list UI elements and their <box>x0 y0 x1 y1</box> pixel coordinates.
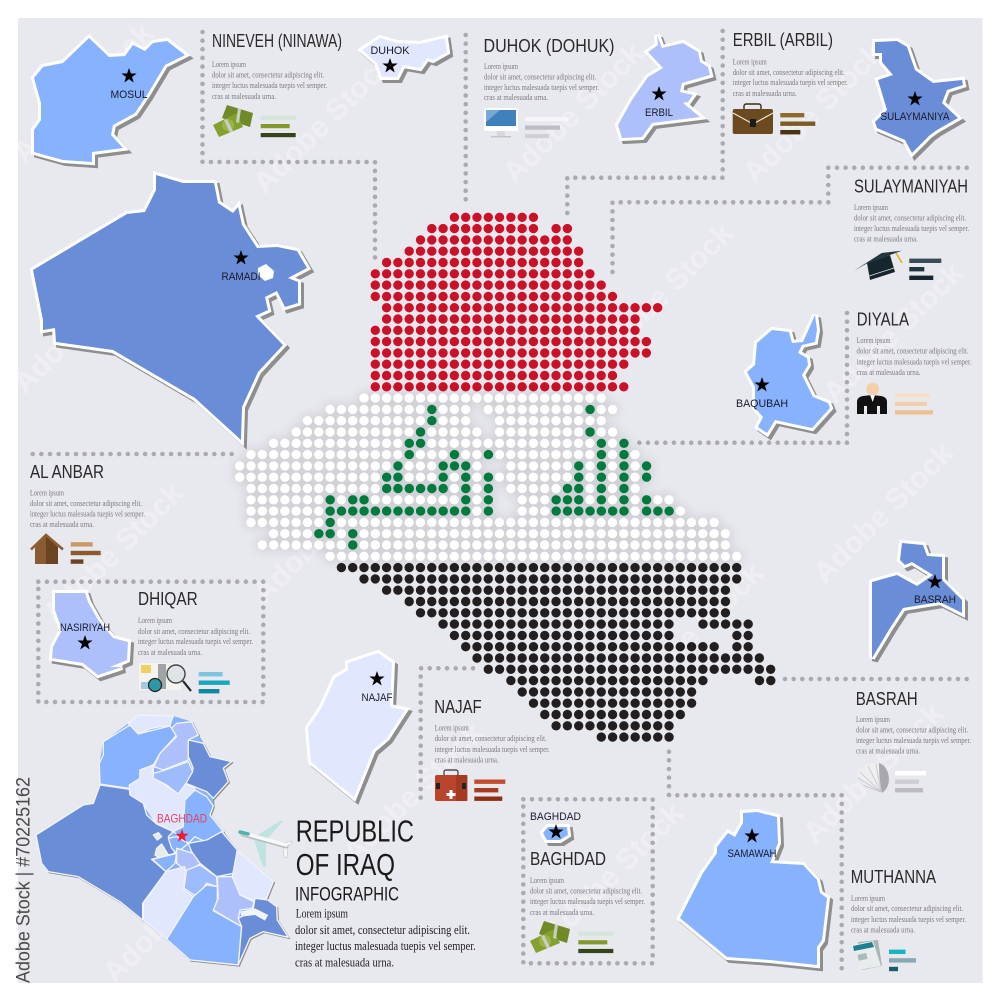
bars: Sulaymaniyah <box>909 259 941 280</box>
text: Adobe Stock <box>37 477 190 630</box>
map: Dhiqar / Nasiriyah <box>52 593 128 675</box>
text: Adobe Stock <box>497 37 650 190</box>
icon: graduation cap <box>854 251 902 280</box>
text block: Duhok: DUHOK (DOHUK) <box>484 36 614 56</box>
text: Adobe Stock <box>617 557 770 710</box>
red band <box>375 217 658 387</box>
title: OF IRAQ <box>296 847 395 882</box>
text block: Dhiqar <box>138 589 253 657</box>
text block: Nineveh <box>212 31 342 101</box>
bars: Erbil <box>780 113 815 134</box>
watermark credit: Adobe Stock | #70225162 <box>13 777 34 983</box>
text block: Erbil: ERBIL (ARBIL) <box>733 30 833 50</box>
text: Adobe Stock <box>797 697 950 850</box>
text block: Nineveh: Lorem ipsum <box>212 59 246 69</box>
black band <box>341 568 771 737</box>
text: Adobe Stock <box>247 47 400 200</box>
bars: Muthanna <box>889 950 916 971</box>
icon: briefcase <box>733 104 773 134</box>
text block: Baghdad <box>530 849 645 917</box>
text block: Nineveh: integer luctus malesuada tuepis vel semper. <box>212 80 327 90</box>
text block: Muthanna: integer luctus malesuada tuepis vel semper. <box>851 914 966 924</box>
map: Sulaymaniyah <box>875 41 963 153</box>
icon: computer monitor <box>484 108 518 138</box>
text block: Diyala: DIYALA <box>857 310 909 330</box>
text block: Basrah: cras at malesuada urna. <box>856 746 920 756</box>
text block: Dhiqar: Lorem ipsum <box>138 615 172 625</box>
text block: Diyala: Lorem ipsum <box>856 335 891 345</box>
icon: money <box>213 105 253 137</box>
text block: Sulaymaniyah: integer luctus malesuada tuepis vel semper. <box>854 223 969 233</box>
capital marker: Baghdad <box>157 812 207 842</box>
text block: Duhok: cras at malesuada urna. <box>484 92 548 102</box>
text block: Basrah: Lorem ipsum <box>856 714 890 724</box>
map: Diyala: BAQUBAH <box>736 398 788 410</box>
text block: Najaf: integer luctus malesuada tuepis vel semper. <box>435 744 550 754</box>
text block: Al Anbar: Lorem ipsum <box>30 488 64 498</box>
text block: Diyala <box>856 310 972 377</box>
map: Al Anbar / Ramadi <box>33 175 307 440</box>
text block: Nineveh: NINEVEH (NINAWA) <box>212 31 342 51</box>
map: Basrah: BASRAH <box>914 594 956 606</box>
bars: Diyala <box>895 393 933 414</box>
bars: Al Anbar <box>71 542 101 564</box>
text block: Najaf: cras at malesuada urna. <box>435 754 499 764</box>
text block: Al Anbar: integer luctus malesuada tuepis vel semper. <box>30 509 145 519</box>
text block: Sulaymaniyah: cras at malesuada urna. <box>854 233 918 243</box>
text block: Dhiqar: dolor sit amet, consectetur adipiscing elit. <box>138 626 250 636</box>
dot map: Iraq flag <box>240 217 771 737</box>
text block: Duhok: dolor sit amet, consectetur adipiscing elit. <box>484 71 596 81</box>
map: Nineveh / Mosul: MOSUL <box>110 89 148 101</box>
text block: Erbil: cras at malesuada urna. <box>733 88 797 98</box>
text block: Sulaymaniyah: Lorem ipsum <box>854 202 888 212</box>
text block: Basrah: BASRAH <box>856 689 918 709</box>
text: Adobe Stock <box>247 457 400 610</box>
bars: Najaf <box>474 780 505 801</box>
text block: Muthanna <box>851 867 966 935</box>
text block: Dhiqar: cras at malesuada urna. <box>138 647 202 657</box>
text block: Duhok: integer luctus malesuada tuepis vel semper. <box>484 82 599 92</box>
map: Muthanna: SAMAWAH <box>728 848 777 860</box>
map: Baghdad small <box>530 811 581 840</box>
capital marker: Baghdad: BAGHDAD <box>157 812 207 826</box>
text block: Al Anbar: AL ANBAR <box>30 462 104 482</box>
text block: Baghdad: Lorem ipsum <box>530 875 564 885</box>
text: Adobe Stock <box>587 217 740 370</box>
text block: Sulaymaniyah: SULAYMANIYAH <box>854 177 968 197</box>
map: Duhok <box>362 38 447 77</box>
title description: cras at malesuada urna. <box>295 955 394 970</box>
text block: Duhok: Lorem ipsum <box>484 61 518 71</box>
text block: Al Anbar: dolor sit amet, consectetur adipiscing elit. <box>30 498 142 508</box>
bars: Dhiqar <box>199 672 230 693</box>
bars: Duhok <box>525 117 568 138</box>
text block: Najaf: dolor sit amet, consectetur adipiscing elit. <box>435 733 547 743</box>
text: Adobe Stock <box>7 17 160 170</box>
title description <box>295 906 476 970</box>
text block: Muthanna: cras at malesuada urna. <box>851 925 915 935</box>
text block: Muthanna: dolor sit amet, consectetur adipiscing elit. <box>851 903 963 913</box>
overview map of Iraq provinces <box>36 715 288 965</box>
text: Adobe Stock <box>537 797 690 950</box>
text block: Diyala: integer luctus malesuada tuepis vel semper. <box>856 357 972 367</box>
icon: shell <box>857 763 889 793</box>
text block: Erbil: integer luctus malesuada tuepis vel semper. <box>733 77 848 87</box>
text block: Baghdad: dolor sit amet, consectetur adipiscing elit. <box>530 885 642 895</box>
title description: dolor sit amet, consectetur adipiscing elit. <box>295 922 470 937</box>
bars: Basrah <box>895 771 926 792</box>
icon: money <box>530 921 570 953</box>
title description: Lorem ipsum <box>296 906 348 921</box>
map: Sulaymaniyah: SULAYMANIYA <box>880 111 950 123</box>
text block: Erbil: dolor sit amet, consectetur adipiscing elit. <box>733 67 845 77</box>
text block: Baghdad: BAGHDAD <box>530 849 606 869</box>
text: Adobe Stock <box>807 437 960 590</box>
text block: Muthanna: Lorem ipsum <box>851 893 885 903</box>
text block: Erbil: Lorem ipsum <box>733 56 767 66</box>
white band <box>240 398 737 556</box>
title: INFOGRAPHIC <box>295 884 399 906</box>
text: Adobe Stock <box>737 37 890 190</box>
text block: Najaf <box>434 697 550 764</box>
text block: Basrah <box>856 689 971 756</box>
map: Najaf: NAJAF <box>362 692 393 704</box>
text block: Diyala: dolor sit amet, consectetur adipiscing elit. <box>856 346 969 356</box>
icon: businessman <box>857 383 887 414</box>
text block: Dhiqar: integer luctus malesuada tuepis vel semper. <box>138 636 253 646</box>
map: Baghdad small: BAGHDAD <box>530 811 581 823</box>
map: Erbil: ERBIL <box>645 107 673 119</box>
text block: Basrah: integer luctus malesuada tuepis vel semper. <box>856 735 971 745</box>
text block: Duhok <box>484 36 614 102</box>
text block: Erbil <box>733 30 848 98</box>
text block: Sulaymaniyah: dolor sit amet, consectetur adipiscing elit. <box>854 212 966 222</box>
text: Adobe Stock <box>7 247 160 400</box>
text block: Al Anbar <box>30 462 145 529</box>
text block: Najaf: Lorem ipsum <box>435 723 469 733</box>
title <box>295 814 414 906</box>
text block: Dhiqar: DHIQAR <box>138 589 198 609</box>
map: Duhok: DUHOK <box>370 45 410 57</box>
text: Adobe Stock <box>817 257 970 410</box>
bars: Nineveh <box>261 116 296 137</box>
icon: map and magnifier <box>139 663 191 692</box>
map: Muthanna <box>680 812 827 965</box>
text block: Al Anbar: cras at malesuada urna. <box>30 519 94 529</box>
text block: Muthanna: MUTHANNA <box>851 867 936 887</box>
text block: Nineveh: dolor sit amet, consectetur adipiscing elit. <box>212 70 324 80</box>
map: Erbil <box>618 35 710 138</box>
text block: Sulaymaniyah <box>854 177 969 243</box>
text block: Diyala: cras at malesuada urna. <box>856 367 920 377</box>
icon: airplane <box>240 821 292 867</box>
map: Dhiqar / Nasiriyah: NASIRIYAH <box>60 622 110 634</box>
text: Adobe Stock <box>97 837 250 990</box>
text block: Nineveh: cras at malesuada urna. <box>212 91 276 101</box>
map: Najaf <box>308 653 405 797</box>
text block: Najaf: NAJAF <box>434 697 482 717</box>
bars: Baghdad <box>578 932 613 953</box>
icon: newspaper <box>852 940 882 970</box>
title: REPUBLIC <box>296 814 414 849</box>
icon: house <box>31 535 63 564</box>
text block: Basrah: dolor sit amet, consectetur adipiscing elit. <box>856 725 968 735</box>
text block: Baghdad: integer luctus malesuada tuepis vel semper. <box>530 896 645 906</box>
map: Basrah <box>872 543 962 658</box>
text: Adobe Stock <box>337 717 490 870</box>
title description: integer luctus malesuada tuepis vel semper. <box>295 938 476 953</box>
text block: Baghdad: cras at malesuada urna. <box>530 907 594 917</box>
green takbir script dots <box>319 409 669 545</box>
map: Al Anbar / Ramadi: RAMADI <box>222 271 260 283</box>
map: Nineveh / Mosul <box>34 38 185 162</box>
map: Diyala <box>736 315 830 433</box>
icon: medical kit <box>435 770 467 801</box>
